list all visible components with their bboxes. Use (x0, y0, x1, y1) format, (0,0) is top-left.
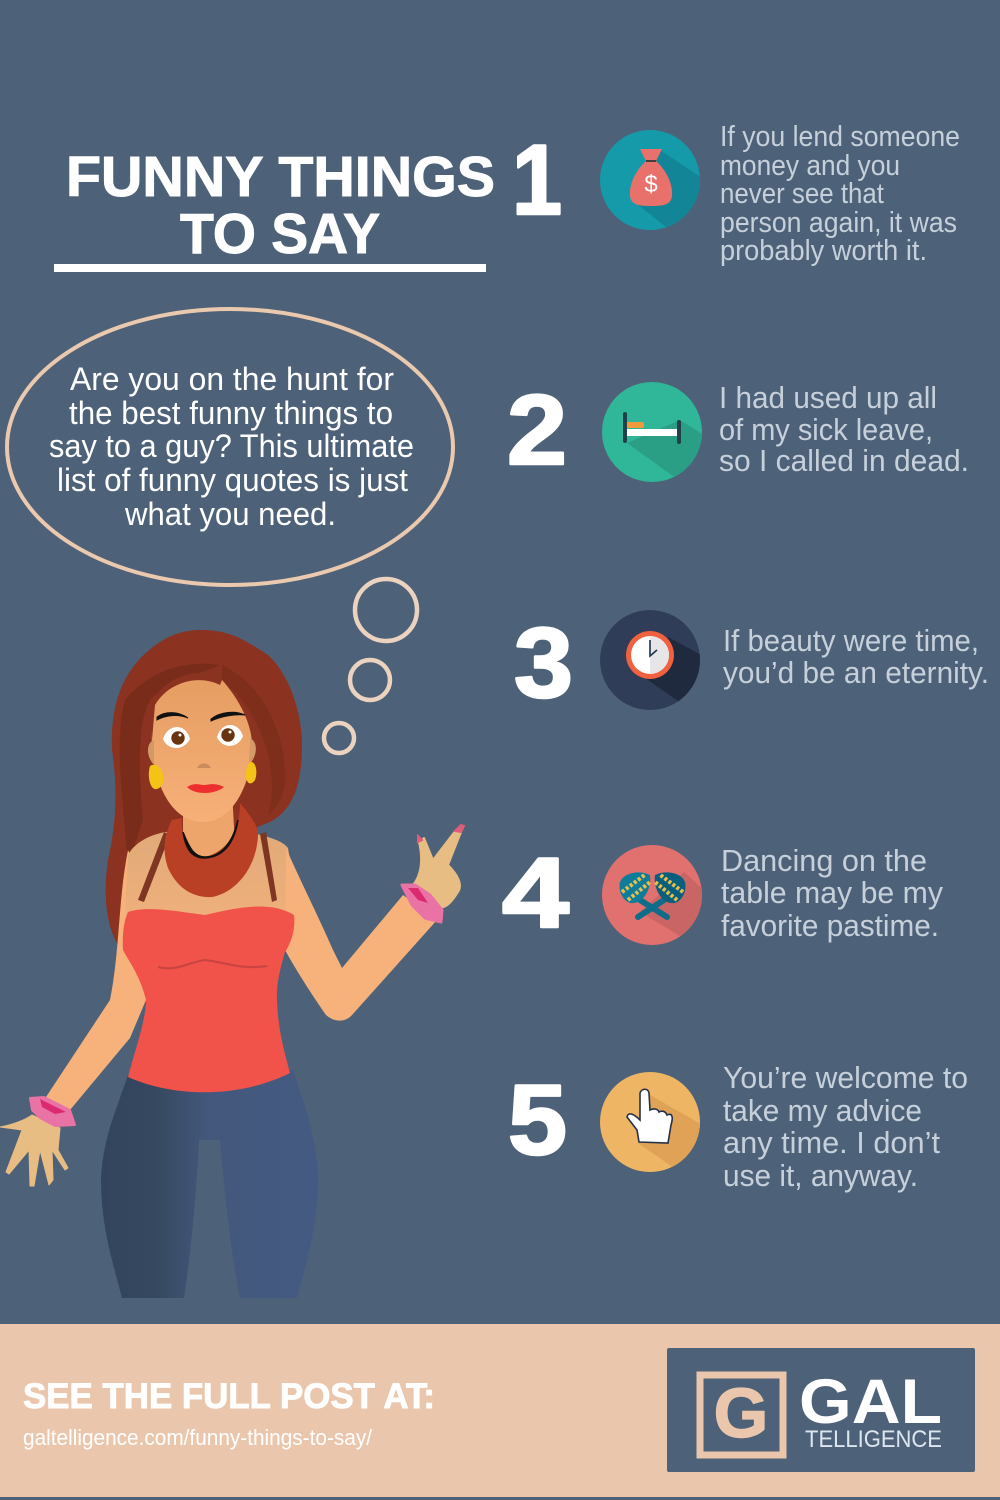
quote 1: If you lend someone (720, 121, 960, 153)
quote 1 (720, 121, 960, 267)
left scrunchie (30, 1097, 75, 1126)
speech bubble: Are you on the hunt for (70, 361, 394, 397)
face (152, 678, 252, 822)
number 4: 4 (502, 837, 569, 948)
jeans (101, 1070, 318, 1298)
quote 5: any time. I don’t (723, 1125, 940, 1160)
title: FUNNY THINGS (66, 145, 495, 209)
title: TO SAY (180, 202, 380, 266)
red top (123, 906, 294, 1092)
quote 2: so I called in dead. (719, 443, 969, 478)
quote 2 (719, 380, 969, 478)
quote 5: take my advice (723, 1093, 922, 1128)
speech bubble: the best funny things to (69, 395, 393, 431)
footer link: galtelligence.com/funny-things-to-say/ (23, 1425, 373, 1450)
quote 1: probably worth it. (720, 235, 927, 267)
straps (138, 832, 277, 902)
nose and lips (197, 764, 211, 768)
icon: money bag (600, 130, 700, 230)
quote 2: I had used up all (719, 380, 937, 415)
number 1: 1 (512, 124, 562, 235)
quote 4: table may be my (721, 875, 943, 910)
quote 3: you’d be an eternity. (723, 655, 989, 690)
icon: pointing hand (600, 1072, 700, 1172)
speech bubble: what you need. (124, 496, 336, 532)
icon: money bag: $ (644, 171, 658, 198)
thought bubbles (324, 579, 417, 753)
quote 1: never see that (720, 178, 884, 210)
speech bubble: say to a guy? This ultimate (49, 428, 414, 464)
ears (148, 738, 256, 765)
number 5: 5 (508, 1064, 567, 1175)
hair back (106, 630, 302, 945)
icon: clock (600, 610, 700, 710)
quote 3: If beauty were time, (723, 623, 979, 658)
pointing hand (410, 827, 463, 908)
logo: TELLIGENCE (805, 1426, 942, 1453)
icon: bed (602, 382, 702, 482)
torso skin (125, 832, 300, 925)
right scrunchie (402, 885, 442, 922)
left arm (46, 850, 150, 1110)
neck (183, 790, 235, 860)
quote 4 (721, 843, 943, 943)
logo: G (714, 1374, 768, 1452)
quote 4: favorite pastime. (721, 908, 939, 943)
speech bubble (7, 309, 453, 585)
forehead hair (150, 673, 222, 740)
woman illustration (0, 630, 464, 1298)
footer panel (0, 1324, 1000, 1497)
quote 4: Dancing on the (721, 843, 927, 878)
logo: GAL (799, 1367, 942, 1437)
right arm (285, 848, 437, 1021)
title (54, 145, 495, 272)
scarf (165, 803, 258, 897)
speech bubble: list of funny quotes is just (57, 462, 408, 498)
earrings (149, 762, 256, 789)
footer heading: SEE THE FULL POST AT: (23, 1377, 435, 1416)
quote 3 (723, 623, 989, 690)
quote 5: You’re welcome to (723, 1060, 968, 1095)
quote 5: use it, anyway. (723, 1158, 918, 1193)
quote 5 (723, 1060, 968, 1193)
icon: maracas (602, 845, 702, 945)
quote 2: of my sick leave, (719, 412, 933, 447)
eyes and brows (163, 725, 243, 748)
left hand (0, 1115, 68, 1186)
quote 1: person again, it was (720, 207, 957, 239)
quote 1: money and you (720, 150, 900, 182)
logo (667, 1348, 975, 1472)
number 3: 3 (514, 607, 573, 718)
number 2: 2 (507, 374, 567, 485)
